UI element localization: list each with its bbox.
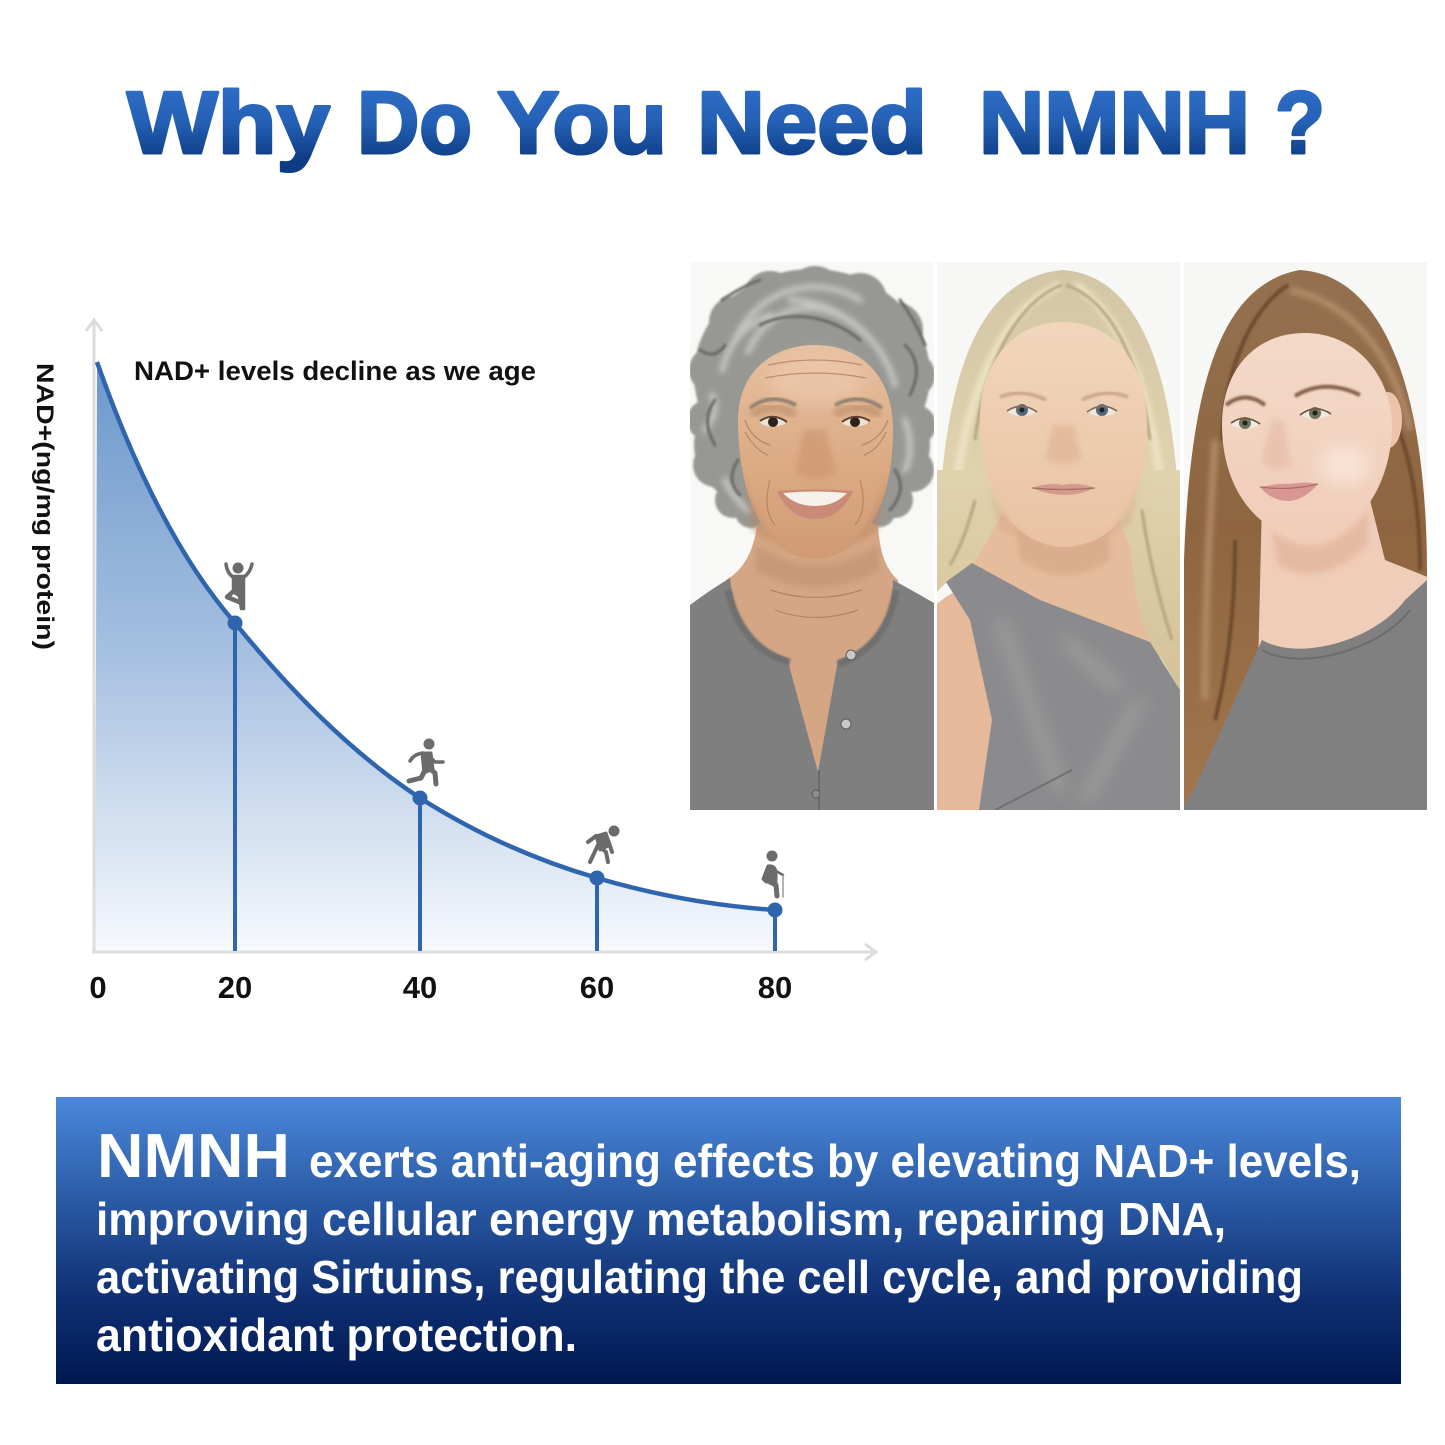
brows and eyes bbox=[752, 408, 880, 415]
title: You bbox=[497, 73, 667, 172]
title: Why bbox=[127, 73, 330, 172]
lips bbox=[1260, 482, 1318, 501]
arm bbox=[937, 593, 992, 810]
portrait: young woman bbox=[1184, 262, 1430, 810]
chart area fill bbox=[95, 362, 775, 950]
y axis label: NAD+(ng/mg protein) bbox=[31, 363, 58, 650]
portrait: older woman bbox=[687, 262, 936, 810]
x axis values: 0 bbox=[89, 970, 107, 1005]
title bbox=[127, 73, 1325, 172]
neck and chest bbox=[1258, 502, 1427, 649]
wrinkles bbox=[745, 360, 888, 618]
brows and eyes bbox=[1226, 387, 1360, 405]
grey t-shirt bbox=[1184, 580, 1427, 810]
neck and chest bbox=[726, 525, 898, 775]
title: Do bbox=[357, 73, 472, 172]
panel: NMNH summary banner bbox=[56, 1097, 1401, 1384]
smile bbox=[777, 490, 853, 519]
lips bbox=[1032, 484, 1095, 495]
x axis values: 60 bbox=[580, 970, 614, 1005]
banner text: antioxidant protection. bbox=[96, 1309, 577, 1361]
title: ? bbox=[1275, 73, 1325, 172]
banner text: NMNH bbox=[97, 1122, 290, 1191]
curly grey hair bbox=[687, 266, 936, 528]
nose bbox=[1045, 425, 1082, 464]
face bbox=[1222, 333, 1392, 540]
chart caption: NAD+ levels decline as we age bbox=[134, 356, 536, 386]
front locks of hair bbox=[937, 470, 1180, 690]
decline curve bbox=[97, 362, 775, 910]
grey cardigan bbox=[690, 578, 934, 810]
x axis values bbox=[89, 970, 792, 1005]
nose bbox=[1262, 420, 1292, 470]
ear bbox=[1386, 392, 1402, 448]
silver top bbox=[946, 563, 1180, 810]
banner background bbox=[56, 1097, 1401, 1384]
face bbox=[738, 345, 893, 559]
neck and chest bbox=[974, 512, 1160, 658]
icon: person at 20 jumping bbox=[226, 562, 252, 609]
nose bbox=[798, 430, 834, 478]
icon: person at 60 stooped bbox=[588, 826, 620, 862]
brown hair bbox=[1184, 270, 1427, 810]
portrait: middle-aged woman bbox=[937, 262, 1180, 810]
chart: NAD+ decline with age bbox=[31, 320, 876, 1005]
face bbox=[980, 322, 1147, 547]
title: NMNH bbox=[979, 73, 1250, 172]
title: Need bbox=[697, 73, 927, 172]
x axis arrow bbox=[92, 944, 876, 960]
blonde hair bbox=[942, 270, 1176, 586]
banner text bbox=[96, 1122, 1361, 1361]
brows and eyes bbox=[1000, 393, 1128, 400]
y axis arrow bbox=[86, 320, 102, 952]
x axis values: 80 bbox=[758, 970, 792, 1005]
icon: person at 40 running bbox=[409, 738, 443, 784]
x axis values: 40 bbox=[403, 970, 437, 1005]
x axis values: 20 bbox=[218, 970, 252, 1005]
icon: person at 80 with cane bbox=[763, 850, 783, 897]
banner text: exerts anti-aging effects by elevating NAD+ levels, bbox=[309, 1135, 1361, 1187]
banner text: improving cellular energy metabolism, repairing DNA, bbox=[96, 1193, 1226, 1245]
banner text: activating Sirtuins, regulating the cell cycle, and providing bbox=[96, 1251, 1303, 1303]
age markers bbox=[230, 618, 780, 951]
